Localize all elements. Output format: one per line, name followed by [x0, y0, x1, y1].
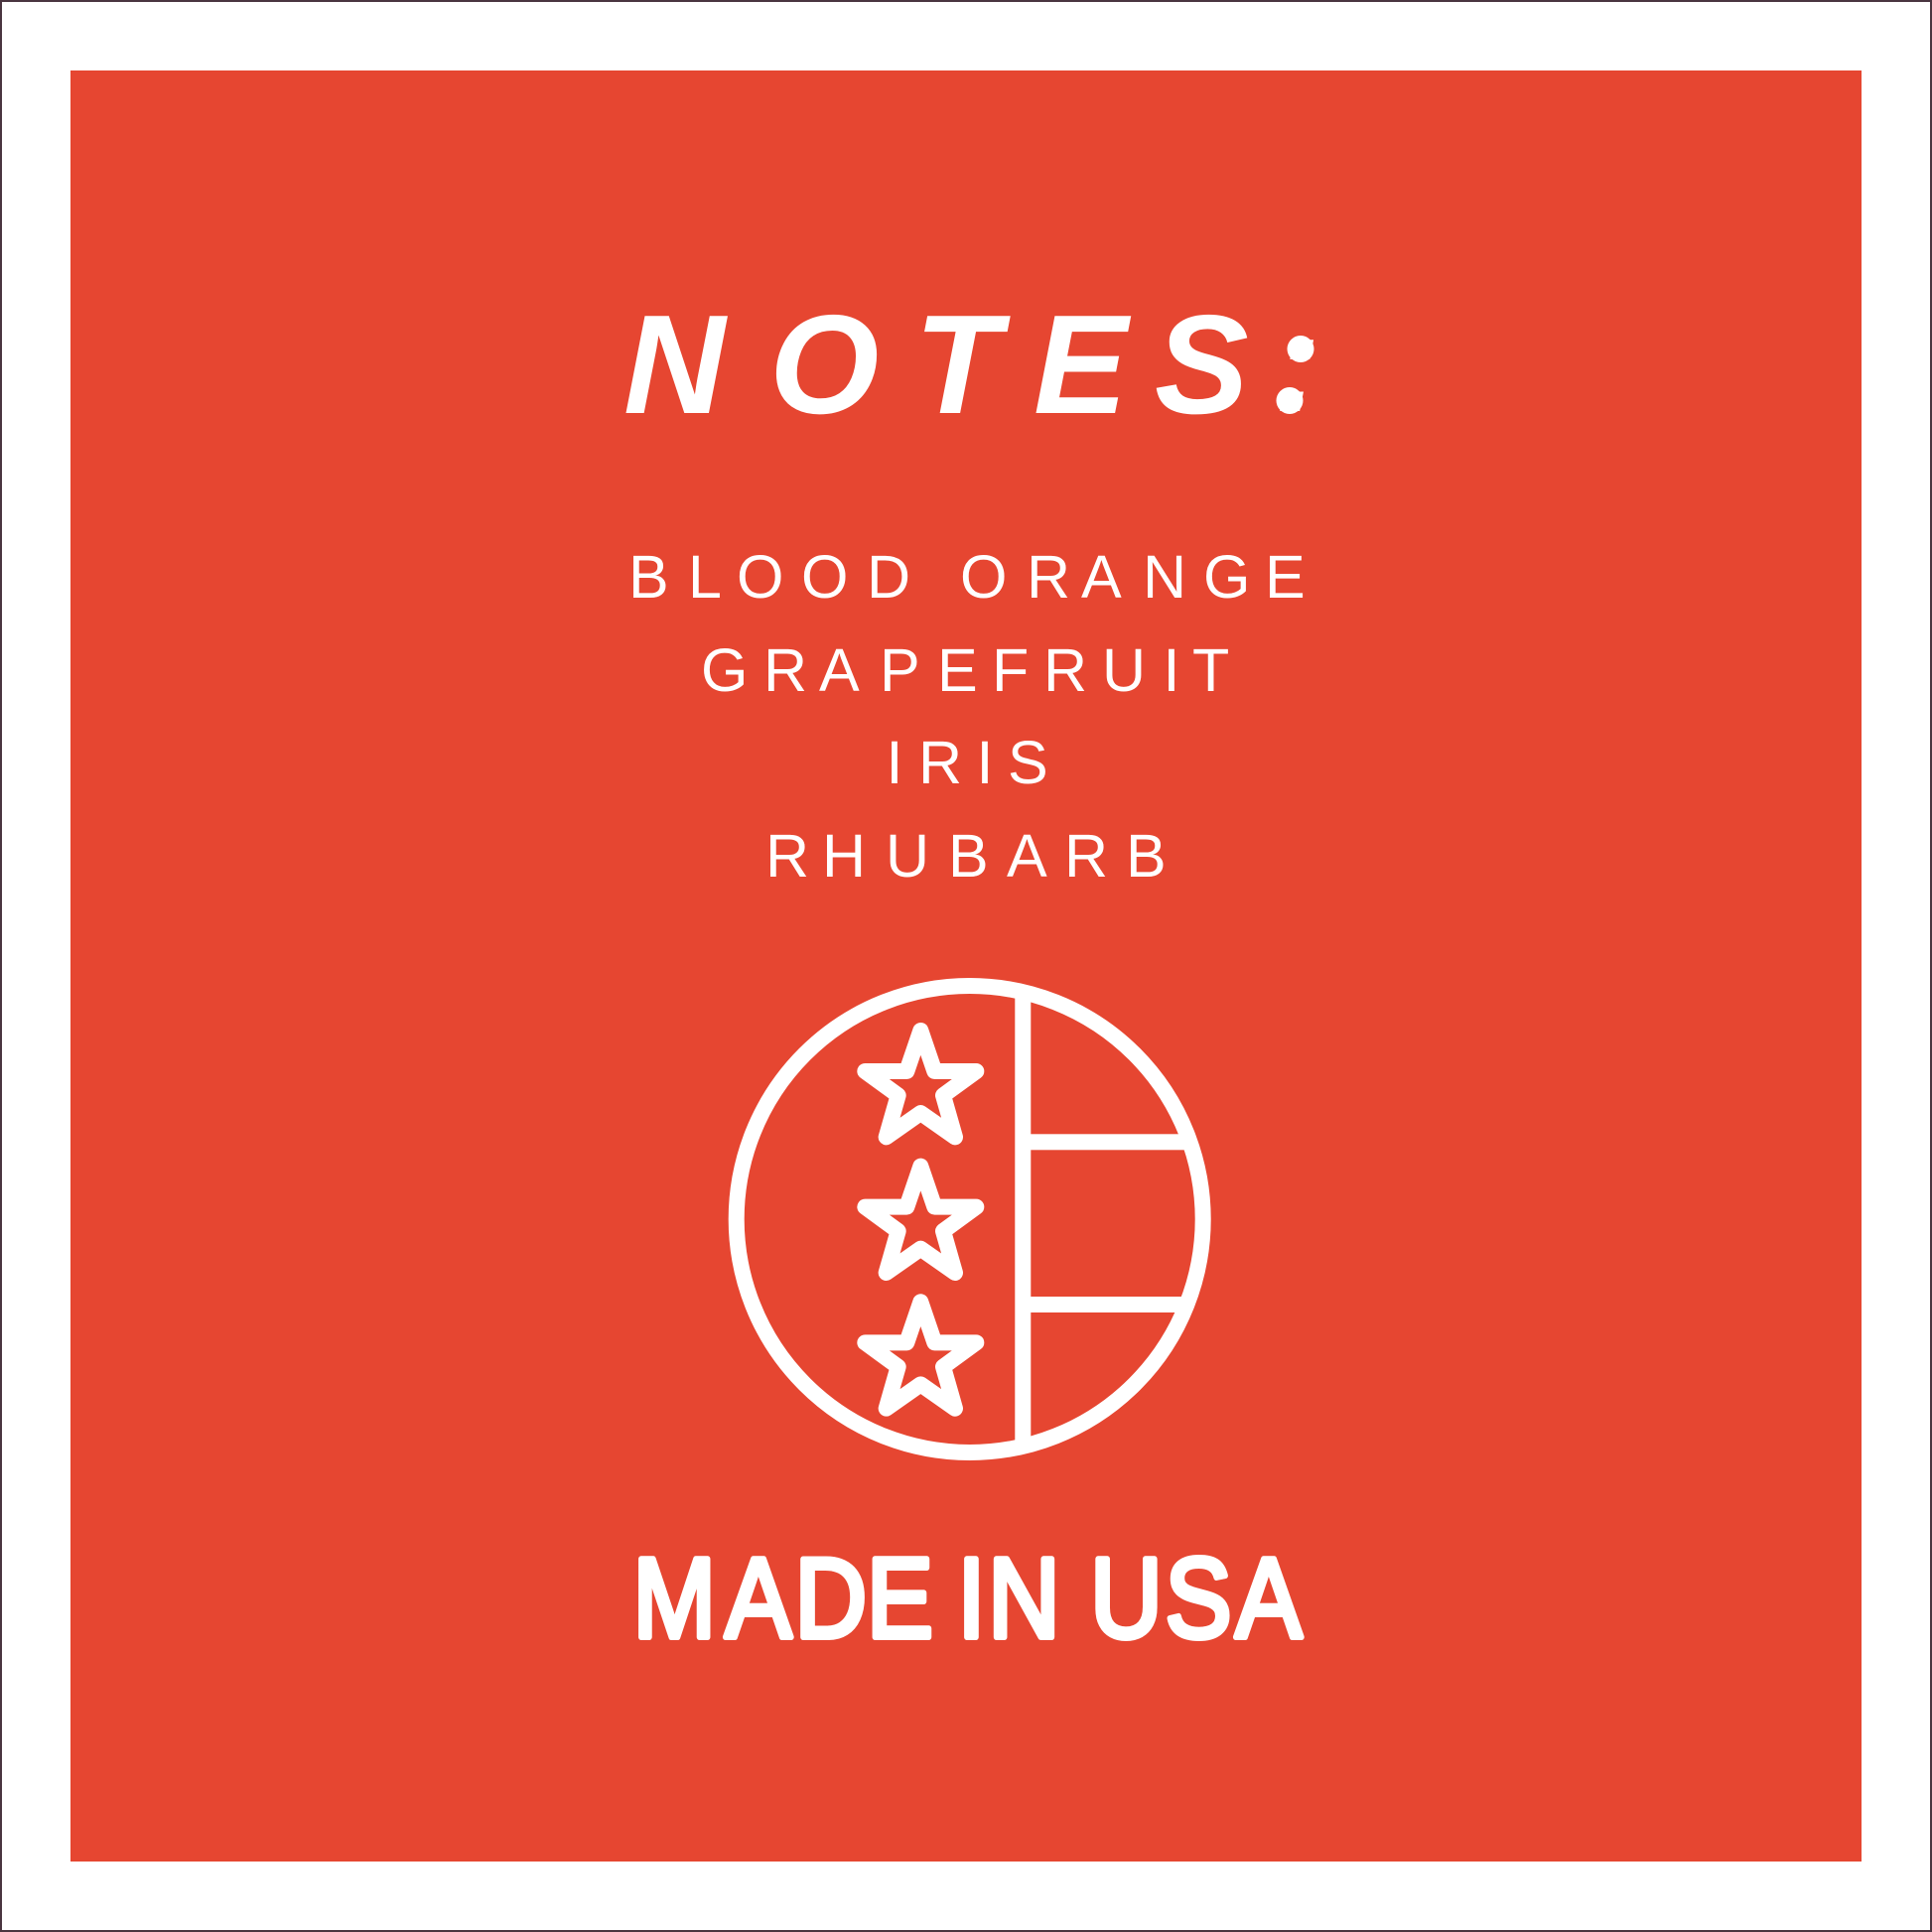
note: grapefruit: GRAPEFRUIT — [701, 636, 1229, 704]
icon: three stars — [865, 1031, 976, 1409]
title text: NOTES — [623, 286, 1249, 444]
icon: flag stripes — [1015, 999, 1184, 1440]
icon: circle outline — [737, 986, 1203, 1452]
title — [623, 284, 1320, 444]
icon: flag globe with stars — [737, 978, 1221, 1460]
note: rhubarb: RHUBARB — [765, 822, 1167, 890]
note: iris: IRIS — [886, 729, 1048, 796]
made in usa label: MADE IN USA — [633, 1535, 1303, 1661]
note: blood orange: BLOOD ORANGE — [628, 543, 1306, 611]
text block: notes list — [628, 543, 1306, 890]
title colon: rounded dots — [1277, 336, 1314, 414]
title text: : — [1274, 284, 1320, 442]
